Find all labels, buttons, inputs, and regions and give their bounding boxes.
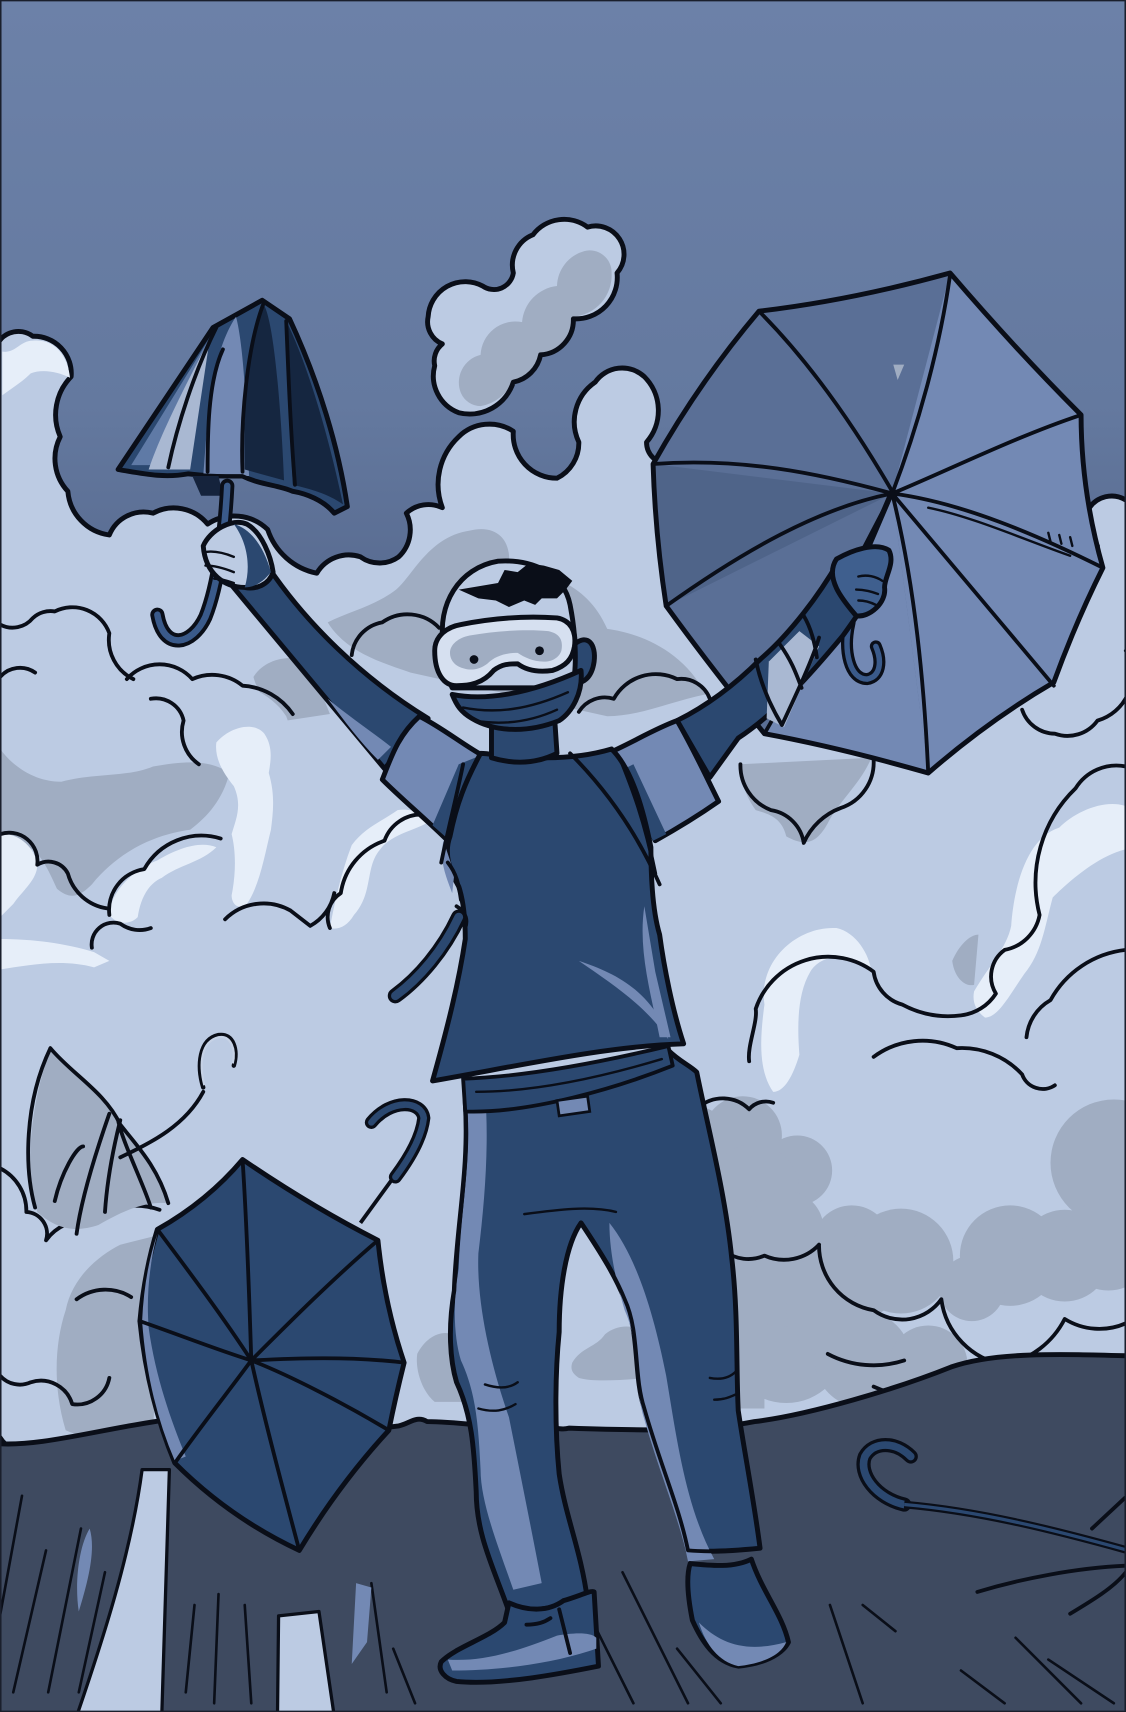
road speed lines (0, 1496, 1114, 1703)
left umbrella handle (157, 486, 227, 640)
right hand open umbrella (653, 273, 1103, 773)
left foreground clouds (0, 1168, 164, 1459)
belt (463, 1046, 673, 1112)
right cloud with highlights (749, 766, 1126, 1092)
right hand (832, 547, 891, 616)
fallen umbrella handle (360, 1175, 395, 1223)
main cloud bank (0, 331, 1126, 1529)
left arm (232, 568, 428, 769)
small floating cloud (428, 219, 624, 414)
lane marking far (277, 1612, 334, 1712)
t-shirt (433, 749, 684, 1081)
lane marking near (77, 1470, 169, 1712)
goggles (435, 617, 575, 686)
face mask (452, 670, 581, 729)
umbrella lying on the road (864, 1445, 1126, 1614)
protester figure (203, 522, 891, 1682)
left cloud stack (0, 600, 293, 930)
white cloud highlights (0, 340, 430, 970)
left shoe (440, 1591, 598, 1682)
left hand (203, 522, 273, 588)
left hand closed umbrella (118, 300, 347, 640)
backpack strap (395, 917, 459, 996)
trousers (450, 1050, 760, 1612)
right umbrella shaft and hook (859, 491, 892, 568)
neck (491, 721, 557, 762)
t-shirt sleeves (382, 716, 483, 843)
lower grey puffs (726, 1228, 968, 1407)
road (0, 1355, 1126, 1712)
light band under puffs (939, 1277, 1126, 1376)
right shoe (688, 1559, 788, 1666)
cloud shadows behind the figure (328, 529, 705, 716)
foreground gas clouds (417, 1096, 1126, 1408)
right arm (677, 560, 876, 777)
hair (459, 563, 572, 607)
tattered umbrella in background (28, 1035, 235, 1234)
fallen open umbrella (140, 1105, 424, 1550)
ear (572, 640, 594, 682)
head (442, 561, 575, 688)
upper grey puffs (660, 1096, 1126, 1321)
